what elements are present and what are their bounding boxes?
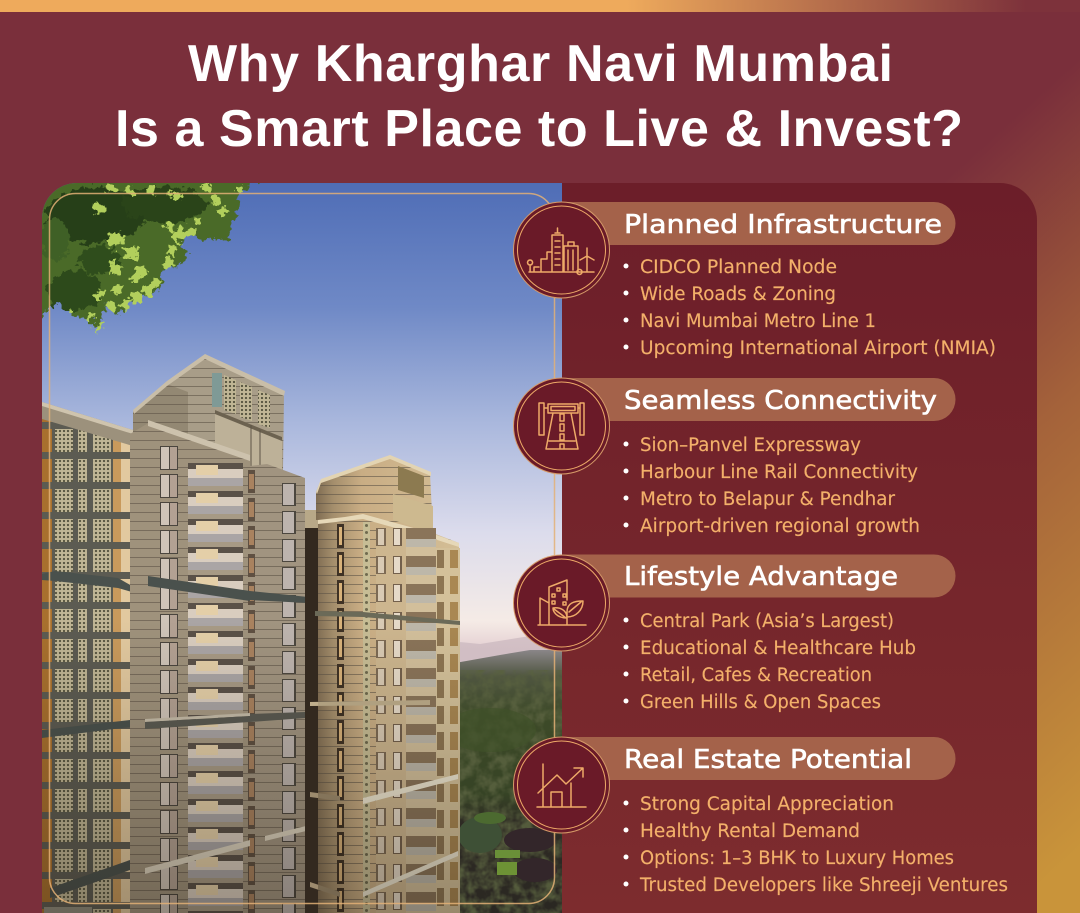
list [624,611,916,713]
heading pill [560,202,956,245]
tower 1: main body [42,420,308,913]
tower 1: crown [133,354,285,470]
tower 1: left wing [42,402,133,913]
title: Is a Smart Place to Live & Invest? [115,100,963,158]
feature: seamless connectivity [514,378,956,537]
list [624,435,920,537]
badge: house and growth chart icon [514,737,610,833]
list: Healthy Rental Demand [640,821,860,842]
list [624,257,996,359]
list: Strong Capital Appreciation [640,794,894,815]
heading pill [560,554,956,598]
title: Why Kharghar Navi Mumbai [188,35,893,93]
badge: city icon [514,202,610,298]
feature: planned infrastructure [514,202,996,359]
feature: lifestyle advantage [514,554,956,713]
hills and fields [460,636,562,913]
sky [42,183,562,662]
list: Navi Mumbai Metro Line 1 [640,311,876,332]
badge: road icon [514,378,610,474]
heading pill [560,737,956,780]
list: Upcoming International Airport (NMIA) [640,338,996,359]
heading pill [560,378,956,421]
heading: Lifestyle Advantage [624,562,898,592]
list: Options: 1–3 BHK to Luxury Homes [640,848,954,869]
heading: Real Estate Potential [624,745,912,775]
list [624,794,1008,896]
thin gold frame [50,194,554,904]
photo: residential towers [36,176,562,913]
tree foliage [36,176,268,333]
list: Retail, Cafes & Recreation [640,665,872,686]
list: CIDCO Planned Node [640,257,837,278]
tower gap [305,510,318,913]
title [115,35,963,158]
list: Educational & Healthcare Hub [640,638,916,659]
list: Airport-driven regional growth [640,516,920,537]
badge: green building icon [514,555,610,651]
top accent bar [0,0,1080,12]
list: Metro to Belapur & Pendhar [640,489,895,510]
list: Harbour Line Rail Connectivity [640,462,918,483]
list: Sion–Panvel Expressway [640,435,861,456]
list: Wide Roads & Zoning [640,284,836,305]
list: Central Park (Asia’s Largest) [640,611,894,632]
list: Trusted Developers like Shreeji Ventures [639,875,1008,896]
panel: features background [562,183,1037,913]
tower 2 [310,455,460,913]
heading: Seamless Connectivity [624,386,937,416]
list: Green Hills & Open Spaces [640,692,881,713]
heading: Planned Infrastructure [624,210,942,240]
feature: real estate potential [514,737,1008,896]
